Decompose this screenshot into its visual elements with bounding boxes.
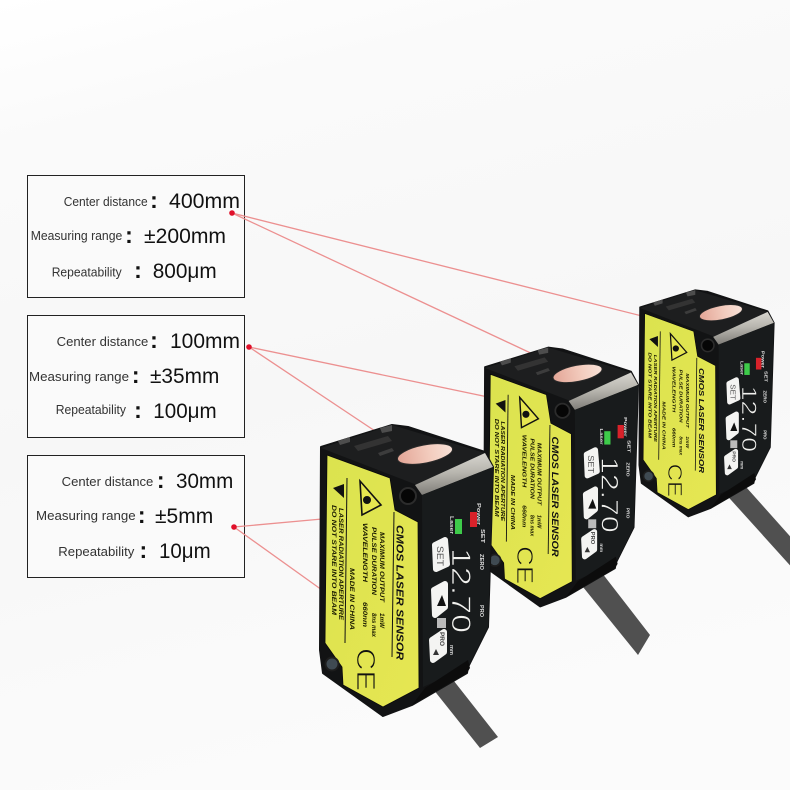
mounting holes (326, 488, 416, 670)
panel: 30mm specifications (28, 456, 244, 578)
cable (433, 676, 498, 748)
buttons: PRO (732, 451, 737, 462)
yellow label: DO NOT STARE INTO BEAM (330, 505, 336, 616)
yellow label (643, 313, 716, 510)
indicators: ZERO (478, 554, 484, 571)
panel: 400mm specifications: : (134, 257, 142, 283)
yellow label: CE (663, 464, 685, 497)
yellow label: CMOS LASER SENSOR (697, 368, 706, 473)
lens (396, 440, 454, 468)
cable (583, 573, 650, 655)
connector base (566, 557, 618, 597)
front face (575, 385, 638, 581)
yellow label: PULSE DURATION (370, 527, 376, 596)
indicators (448, 503, 485, 655)
panel: 400mm specifications: 800μm (153, 260, 217, 283)
panel: 30mm specifications: Repeatability (58, 545, 135, 559)
buttons: PRO (438, 632, 444, 646)
top face (640, 290, 768, 337)
yellow label: WAVELENGTH (520, 435, 526, 487)
metal strip (569, 372, 638, 410)
yellow label: 8ns max (679, 436, 684, 455)
sensor: far right (639, 290, 790, 572)
indicators: mm (739, 461, 744, 469)
indicators: Power (760, 351, 765, 368)
buttons (432, 540, 447, 660)
body (639, 290, 774, 517)
callout lines: 100mm (246, 344, 488, 431)
mounting holes (644, 339, 714, 481)
panel: 100mm specifications: Center distance (57, 335, 148, 349)
panel: 30mm specifications: Measuring range (36, 509, 136, 523)
panel: 100mm specifications: : (132, 362, 140, 388)
yellow label: LASER RADIATION APERTURE (499, 421, 505, 522)
display readout: 12.70 (596, 457, 623, 533)
yellow label: 1mW (378, 613, 384, 629)
display readout: 12.70 (446, 548, 476, 633)
buttons (726, 380, 738, 473)
yellow label: CMOS LASER SENSOR (394, 525, 404, 661)
top face (485, 348, 631, 401)
yellow label: MAXIMUM OUTPUT (535, 443, 541, 506)
yellow label: 1mW (685, 436, 690, 449)
yellow label: PULSE DURATION (528, 438, 534, 499)
panel: 30mm specifications: : (157, 467, 165, 493)
yellow label: WAVELENGTH (361, 523, 367, 583)
indicators: PRO (478, 605, 484, 618)
indicators: Laser (448, 516, 454, 535)
sensor: middle (484, 348, 650, 655)
panel: 100mm specifications: ±35mm (150, 365, 219, 388)
cable (722, 478, 790, 572)
panel: 30mm specifications: Center distance (62, 475, 153, 489)
yellow label (489, 374, 572, 599)
panel: 30mm specifications: : (138, 502, 146, 528)
panel: 400mm specifications: Center distance (64, 195, 148, 209)
panel: 100mm specifications: Measuring range (29, 370, 129, 384)
yellow label: LASER RADIATION APERTURE (653, 355, 658, 443)
yellow label: MAXIMUM OUTPUT (685, 373, 690, 429)
yellow label: CE (512, 546, 538, 584)
yellow label: 8ns max (528, 515, 534, 537)
panel: 30mm specifications: : (139, 537, 147, 563)
indicators: SET (764, 371, 769, 382)
indicators: SET (625, 440, 631, 453)
metal strip (713, 312, 774, 345)
yellow label: 660nm (361, 602, 367, 628)
yellow label: LASER RADIATION APERTURE (337, 508, 343, 621)
indicators: PRO (624, 508, 630, 519)
yellow label: 660nm (672, 428, 677, 447)
indicators: SET (479, 529, 485, 544)
sensor: front (320, 425, 498, 748)
connector base (412, 660, 470, 705)
panel: 400mm specifications: : (150, 187, 158, 213)
panel: 100mm specifications: 100mm (170, 330, 240, 353)
indicators (739, 351, 769, 469)
body (484, 348, 638, 607)
indicators: Laser (739, 361, 744, 375)
body (320, 425, 493, 716)
panel: 100mm specifications: : (150, 327, 158, 353)
yellow label: DO NOT STARE INTO BEAM (648, 352, 653, 438)
indicators: Laser (598, 429, 604, 445)
yellow label: WAVELENGTH (672, 366, 677, 413)
buttons: SET (728, 384, 735, 401)
panel: 30mm specifications: 30mm (176, 470, 233, 493)
yellow label: MAXIMUM OUTPUT (378, 532, 384, 604)
buttons (584, 450, 597, 557)
panel: 400mm specifications: ±200mm (144, 225, 226, 248)
front face (719, 323, 774, 494)
yellow label: MADE IN CHINA (509, 475, 515, 530)
panel: 400mm specifications (28, 176, 244, 298)
yellow label: MADE IN CHINA (348, 568, 354, 630)
yellow label (325, 455, 419, 707)
panel: 100mm specifications: 100μm (153, 400, 217, 423)
indicators: ZERO (763, 391, 768, 404)
front face (422, 467, 493, 687)
indicators: mm (598, 543, 603, 553)
panel: 100mm specifications: Repeatability (56, 403, 127, 417)
indicators: Power (475, 503, 481, 526)
panel: 30mm specifications: 10μm (159, 540, 211, 563)
lens (552, 361, 604, 386)
yellow label: 1mW (535, 515, 541, 529)
panel: 100mm specifications: : (134, 397, 142, 423)
panel: 400mm specifications: Measuring range (31, 229, 122, 243)
yellow label: 8ns max (370, 613, 376, 638)
yellow label: CMOS LASER SENSOR (550, 437, 560, 557)
panel: 400mm specifications: 400mm (169, 190, 240, 213)
yellow label: MADE IN CHINA (662, 401, 667, 450)
indicators: mm (448, 645, 454, 655)
yellow label: CE (351, 648, 381, 691)
panel: 100mm specifications (28, 316, 244, 438)
indicators: PRO (763, 430, 768, 440)
buttons: SET (586, 455, 595, 473)
callout lines: 400mm (229, 210, 642, 356)
yellow label: PULSE DURATION (679, 370, 684, 423)
yellow label: DO NOT STARE INTO BEAM (493, 419, 499, 517)
panel: 400mm specifications: : (125, 222, 133, 248)
top face (321, 425, 485, 485)
metal strip (415, 453, 493, 495)
display readout: 12.70 (737, 386, 760, 452)
indicators: ZERO (624, 462, 630, 477)
buttons: SET (435, 546, 445, 567)
yellow label: 660nm (520, 505, 526, 528)
panel: 400mm specifications: Repeatability (52, 266, 122, 280)
buttons: PRO (589, 532, 595, 544)
mounting holes (489, 404, 570, 566)
lens (698, 302, 744, 324)
panel: 30mm specifications: ±5mm (155, 505, 213, 528)
indicators (598, 417, 631, 553)
indicators: Power (622, 417, 628, 437)
callout lines: 30mm (231, 519, 322, 590)
connector base (711, 473, 756, 508)
